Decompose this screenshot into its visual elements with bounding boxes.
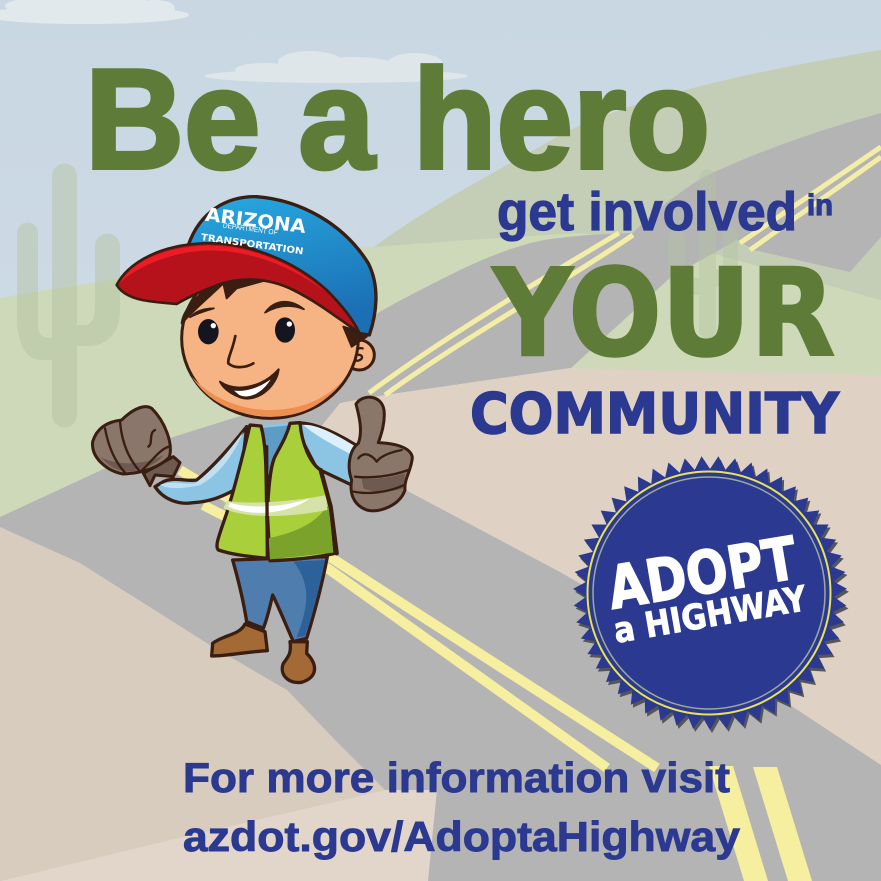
character: highway worker xyxy=(93,197,412,683)
far hill xyxy=(374,50,881,300)
nose xyxy=(228,336,253,367)
main road xyxy=(0,400,881,881)
shirt collar xyxy=(258,425,293,473)
sand: lower left xyxy=(0,527,385,881)
cloud: behind title xyxy=(204,51,468,83)
badge text: ADOPT: ADOPT xyxy=(603,523,802,623)
cap logo text: DEPARTMENT OF xyxy=(222,220,279,237)
right glove xyxy=(349,397,412,511)
cap logo text xyxy=(200,205,307,257)
brows xyxy=(190,302,304,317)
vest shadow xyxy=(269,505,333,559)
cloud: top left xyxy=(0,0,189,24)
cap logo text: TRANSPORTATION xyxy=(200,232,304,257)
vest outline xyxy=(321,470,337,553)
double yellow line: upper far xyxy=(740,147,881,250)
right shoe xyxy=(282,642,315,683)
face xyxy=(182,258,358,418)
vest reflective stripe xyxy=(223,495,327,516)
badge: adopt a highway xyxy=(573,412,881,763)
subheading: get involved in: get involved xyxy=(497,182,797,242)
left glove xyxy=(93,407,180,486)
left shoe xyxy=(212,624,267,656)
mouth xyxy=(220,369,279,399)
shirt torso xyxy=(250,423,297,560)
sand: lower light wedge xyxy=(0,790,437,881)
eyes xyxy=(198,317,295,344)
badge text: a HIGHWAY: a HIGHWAY xyxy=(611,579,810,652)
cap crown xyxy=(188,197,376,335)
subheading: get involved in: in xyxy=(807,189,833,222)
safety vest xyxy=(217,423,337,561)
heading: YOUR: YOUR xyxy=(491,245,835,384)
left arm xyxy=(155,427,247,503)
hair xyxy=(182,277,367,347)
right arm xyxy=(293,423,363,485)
sand: right xyxy=(310,368,881,765)
footer: more information: For more information visit xyxy=(183,754,730,801)
footer: more information: azdot.gov/AdoptaHighway xyxy=(183,813,741,860)
cactus: right xyxy=(668,170,738,338)
vest right panel xyxy=(267,423,335,561)
upper road xyxy=(240,113,881,440)
ear xyxy=(344,340,374,370)
cap visor rim xyxy=(119,246,325,292)
face shadow xyxy=(192,377,343,417)
pants xyxy=(233,557,327,642)
near green hill xyxy=(0,233,881,540)
cap logo text: ARIZONA xyxy=(204,205,307,238)
heading: COMMUNITY: COMMUNITY xyxy=(470,382,840,447)
cap visor xyxy=(117,243,359,333)
double yellow line: lower xyxy=(180,470,657,768)
vest left panel xyxy=(217,425,268,558)
double yellow line: foreground xyxy=(709,766,812,881)
title: Be a hero: Be a hero xyxy=(85,40,710,199)
cap xyxy=(117,197,376,335)
footer: more information xyxy=(183,754,741,860)
cactus: left xyxy=(17,164,120,428)
double yellow line: upper near xyxy=(369,233,633,395)
head xyxy=(182,258,374,418)
